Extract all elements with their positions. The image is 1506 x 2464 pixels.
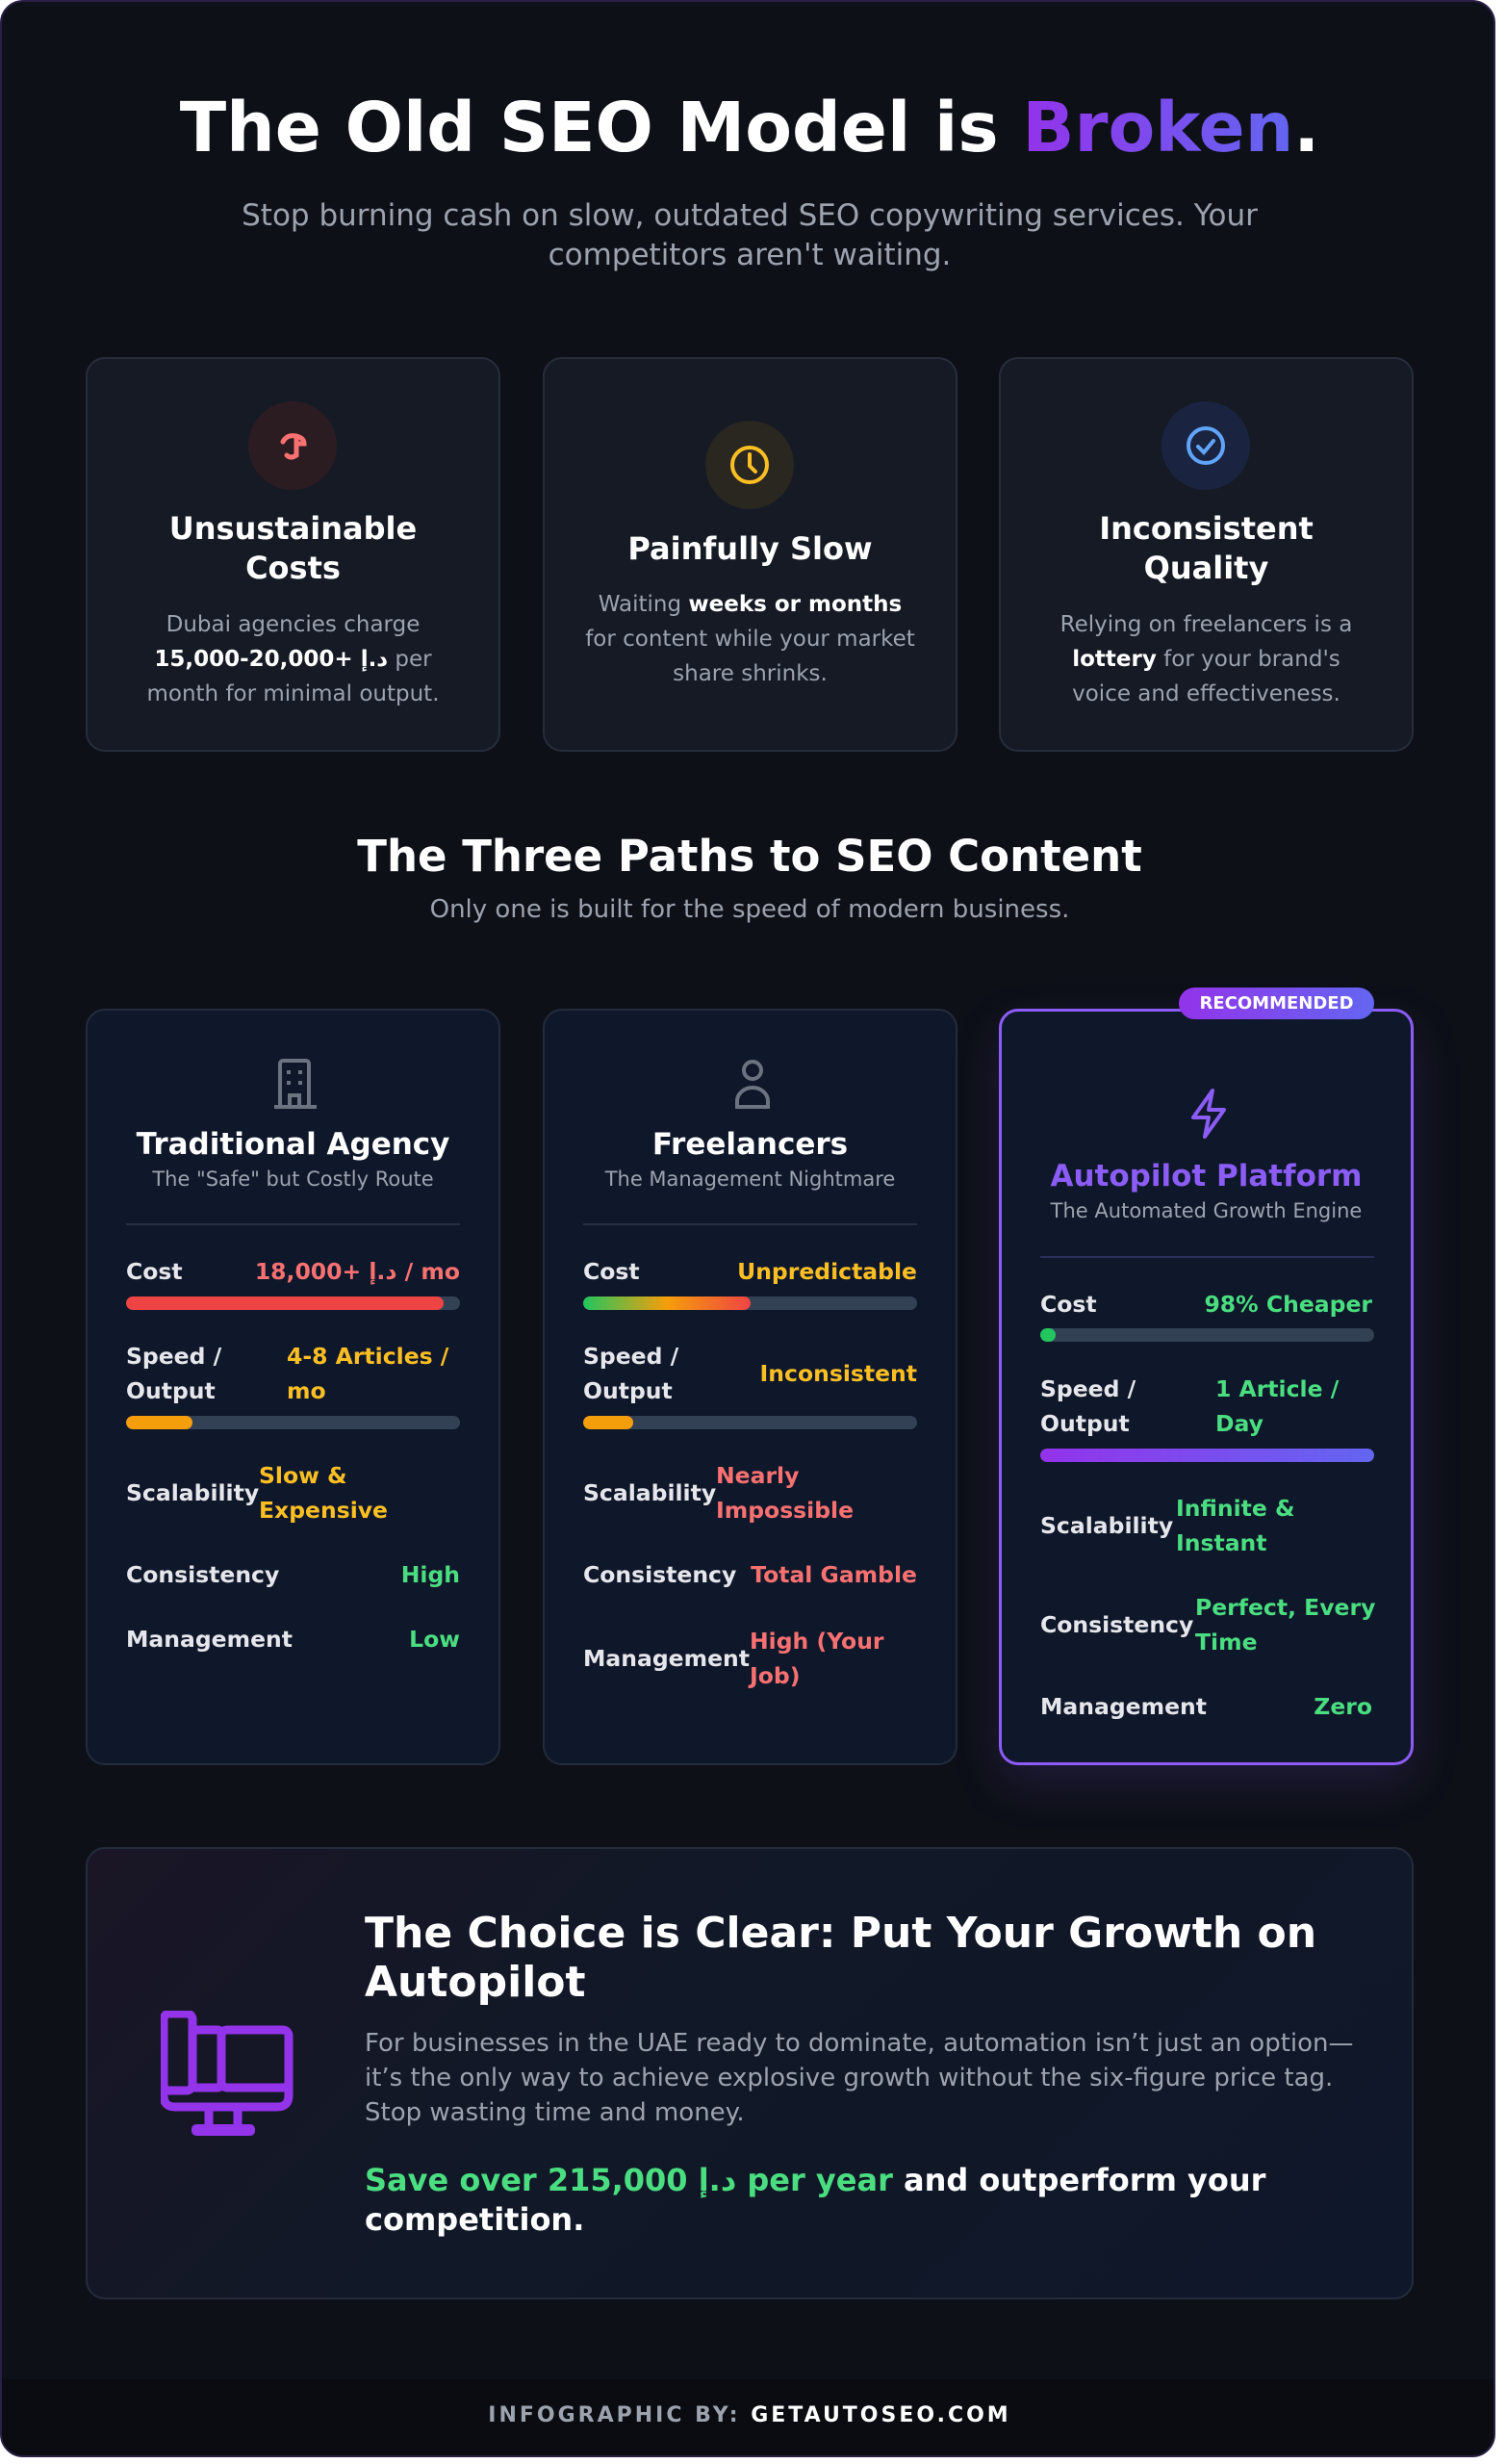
panel: traditional agency: 4-8 Articles / [287, 1343, 448, 1370]
panel: inconsistent quality [999, 357, 1414, 752]
text [146, 612, 440, 706]
footer credit: INFOGRAPHIC BY: GETAUTOSEO.COM [488, 2403, 1011, 2427]
icon: money [248, 401, 337, 490]
badge: recommended [1179, 988, 1374, 1019]
heading: Quality [1144, 550, 1268, 586]
body text: it’s the only way to achieve explosive growth without the six-figure price tag. [365, 2064, 1333, 2092]
heading [169, 510, 417, 586]
heading: Costs [245, 550, 341, 586]
row: cost: Cost [1040, 1291, 1097, 1318]
body text: Stop wasting time and money. [365, 2098, 745, 2127]
panel: autopilot platform: Infinite & [1176, 1495, 1295, 1522]
text: 15,000-20,000+ د.إ per [154, 647, 432, 672]
panel: autopilot platform: Time [1195, 1629, 1258, 1656]
subheading: The Management Nightmare [605, 1168, 895, 1191]
row: scalability: Scalability [126, 1479, 259, 1506]
row: cost: Cost [583, 1258, 640, 1285]
heading: Autopilot [365, 1958, 586, 2007]
row: consistency: Consistency [1040, 1611, 1193, 1638]
heading: Freelancers [652, 1127, 848, 1162]
row: speed: Output [583, 1377, 673, 1404]
subheading: The Automated Growth Engine [1051, 1199, 1362, 1222]
row: speed: Output [126, 1377, 216, 1404]
text: voice and effectiveness. [1072, 681, 1340, 706]
panel: traditional agency: Expensive [259, 1497, 388, 1524]
badge: recommended: RECOMMENDED [1199, 993, 1354, 1014]
row: consistency: Consistency [126, 1561, 279, 1588]
savings callout: Save over 215,000 د.إ per year and outperform your [365, 2162, 1265, 2198]
subtitle: Stop burning cash on slow, outdated SEO copywriting services. Your [242, 198, 1258, 233]
row: management: Management [1040, 1693, 1207, 1720]
icon: lightning [1191, 1089, 1226, 1139]
panel: call to action [86, 1847, 1414, 2299]
row: management: Management [126, 1626, 293, 1653]
text: lottery for your brand's [1072, 647, 1340, 672]
heading: The Choice is Clear: Put Your Growth on [365, 1909, 1316, 1958]
panel: traditional agency: High [401, 1561, 460, 1588]
savings callout: competition. [365, 2201, 584, 2238]
panel: autopilot platform: 1 Article / [1215, 1375, 1339, 1402]
text: for content while your market [585, 627, 915, 652]
panel: autopilot platform: Zero [1314, 1693, 1372, 1720]
panel: freelancers: Inconsistent [760, 1360, 917, 1387]
icon: building [274, 1059, 317, 1109]
row: speed [1040, 1375, 1136, 1437]
panel: freelancers [543, 1009, 957, 1765]
subtitle: competitors aren't waiting. [549, 238, 951, 272]
row: consistency: Consistency [583, 1561, 736, 1588]
panel: traditional agency: mo [287, 1377, 326, 1404]
row: scalability: Scalability [1040, 1512, 1173, 1539]
row: speed: Speed / [1040, 1375, 1136, 1402]
row: speed: Speed / [583, 1343, 678, 1370]
panel: traditional agency: 18,000+ د.إ / mo [255, 1258, 460, 1285]
row: speed: Speed / [126, 1343, 221, 1370]
text: month for minimal output. [146, 681, 440, 706]
panel: autopilot platform: 98% Cheaper [1204, 1291, 1372, 1318]
heading [1099, 510, 1314, 586]
panel: freelancers: Impossible [716, 1497, 854, 1524]
heading [365, 1909, 1316, 2007]
heading: Unsustainable [169, 510, 417, 547]
text [1060, 612, 1352, 706]
panel: autopilot platform [999, 1009, 1414, 1765]
panel: autopilot platform: Instant [1176, 1529, 1267, 1556]
panel: autopilot platform: Day [1215, 1410, 1264, 1437]
icon: check [1161, 401, 1250, 490]
icon: monitor [161, 2011, 293, 2136]
panel: freelancers: High (Your [750, 1628, 884, 1655]
panel: traditional agency [86, 1009, 500, 1765]
panel: traditional agency: Slow & [259, 1462, 347, 1489]
panel: painfully slow [543, 357, 957, 752]
text: Waiting weeks or months [599, 592, 902, 617]
text: Relying on freelancers is a [1060, 612, 1352, 637]
heading: Inconsistent [1099, 510, 1314, 547]
section heading: The Three Paths to SEO Content [357, 831, 1142, 882]
row: speed [583, 1343, 679, 1404]
row: speed: Output [1040, 1410, 1130, 1437]
panel: freelancers: Job) [750, 1662, 800, 1689]
text: share shrinks. [673, 661, 828, 686]
row: speed [126, 1343, 221, 1404]
body text [365, 2029, 1353, 2127]
panel: unsustainable costs [86, 357, 500, 752]
panel: freelancers: Total Gamble [751, 1561, 917, 1588]
section subtitle: Only one is built for the speed of modern business. [430, 895, 1069, 924]
title: The Old SEO Model is Broken. [180, 88, 1319, 167]
heading: Painfully Slow [627, 530, 873, 567]
panel: traditional agency: Low [409, 1626, 460, 1653]
panel: freelancers: Nearly [716, 1462, 799, 1489]
icon: person [735, 1060, 770, 1109]
heading: Traditional Agency [137, 1127, 449, 1162]
subheading: The "Safe" but Costly Route [152, 1168, 434, 1191]
panel: freelancers: Unpredictable [737, 1258, 917, 1285]
row: scalability: Scalability [583, 1479, 716, 1506]
icon: clock [705, 421, 794, 509]
footer [2, 2379, 1497, 2461]
text: Dubai agencies charge [166, 612, 420, 637]
row: cost: Cost [126, 1258, 183, 1285]
subtitle [242, 198, 1258, 272]
row: management: Management [583, 1645, 750, 1672]
heading: Autopilot Platform [1051, 1159, 1363, 1194]
text [585, 592, 915, 686]
panel: autopilot platform: Perfect, Every [1195, 1594, 1375, 1621]
savings callout [365, 2162, 1266, 2238]
body text: For businesses in the UAE ready to dominate, automation isn’t just an option— [365, 2029, 1353, 2058]
